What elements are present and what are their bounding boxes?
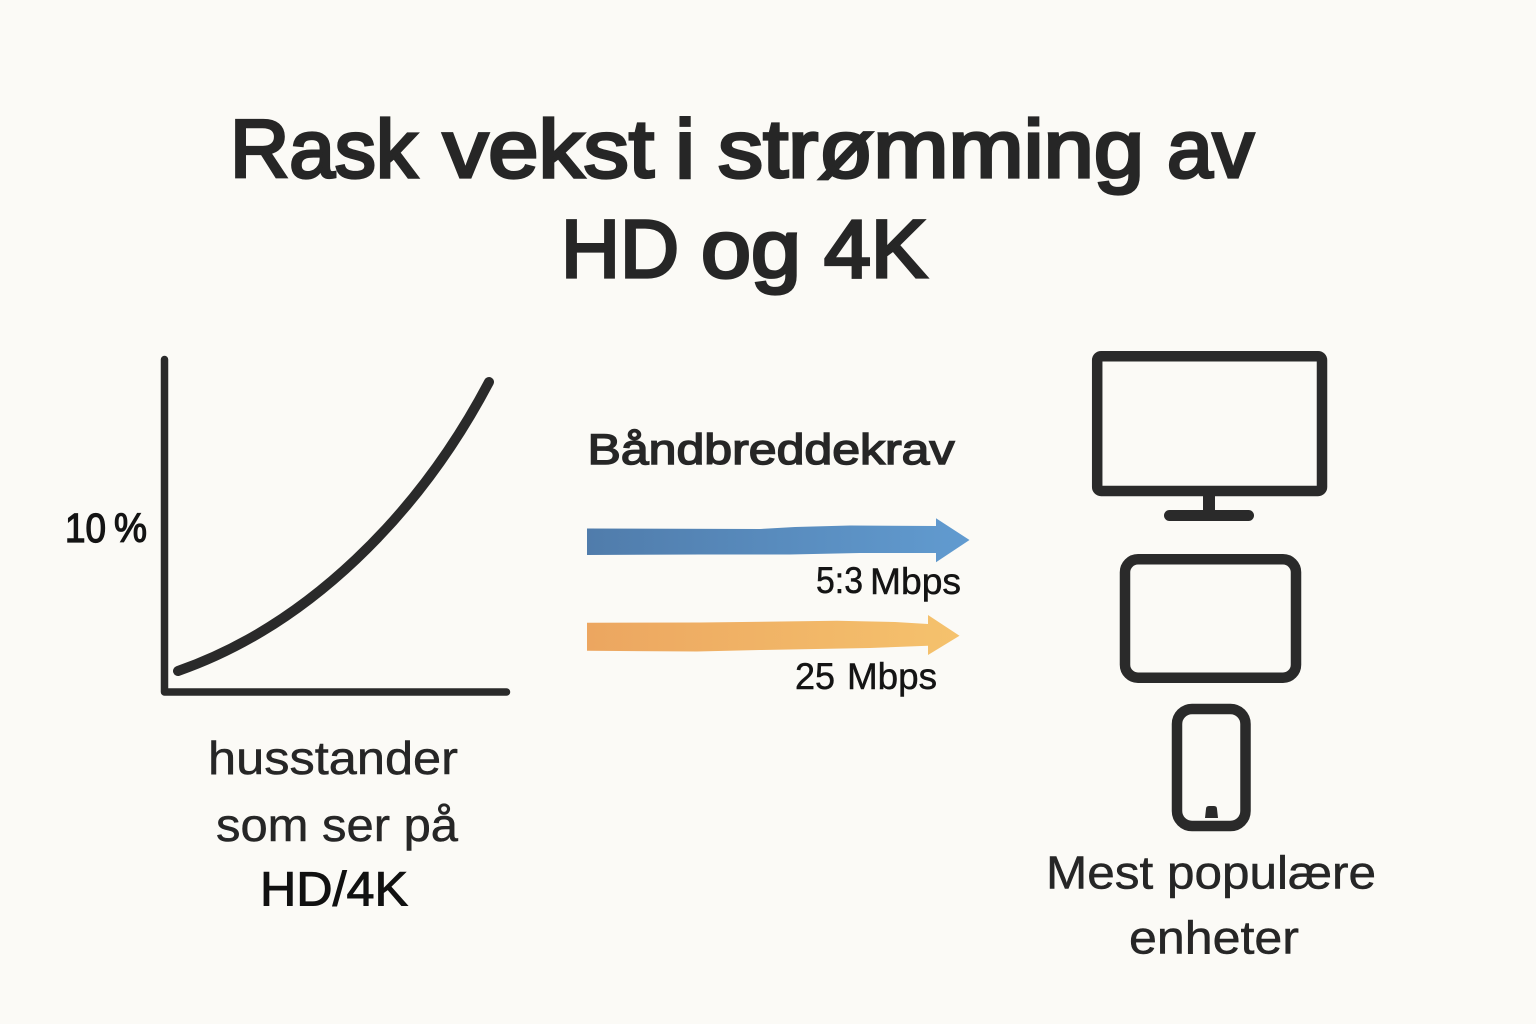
value label: % [114,505,147,551]
icon: smartphone [1177,709,1246,826]
bandwidth heading: Båndbreddekrav [588,426,955,474]
chart caption: HD/4K [260,864,408,916]
icon: television [1097,356,1322,516]
label: 25 Mbps: 25 [795,656,835,697]
label: 25 Mbps [795,656,937,697]
title: Rask [230,104,418,195]
chart caption: husstander [208,732,458,784]
label: 5.3 Mbps [816,560,961,602]
title: HD [561,204,679,295]
title: av [1167,104,1254,195]
title: strømming [718,104,1144,195]
devices caption: Mest populære [1046,846,1376,898]
label: 25 Mbps: Mbps [847,656,937,697]
growth curve [178,382,489,671]
arrow: orange 25 Mbps [587,615,960,655]
value label [65,505,147,551]
title [230,104,1254,295]
chart axes [164,360,506,692]
title: 4K [824,204,927,295]
label: 5.3 Mbps: Mbps [870,561,961,602]
devices caption: enheter [1129,912,1299,964]
arrow: blue 5.3 Mbps [587,518,970,562]
chart caption [208,732,458,916]
label: 5.3 Mbps: 5:3 [816,560,863,601]
line chart: growth curve [65,360,506,692]
value label: 10 [65,505,106,551]
icon: tablet [1125,559,1296,678]
chart caption: som ser på [216,799,458,851]
title: og [701,204,801,295]
title: i [676,104,694,195]
devices caption [1046,846,1376,964]
title: vekst [443,104,654,195]
